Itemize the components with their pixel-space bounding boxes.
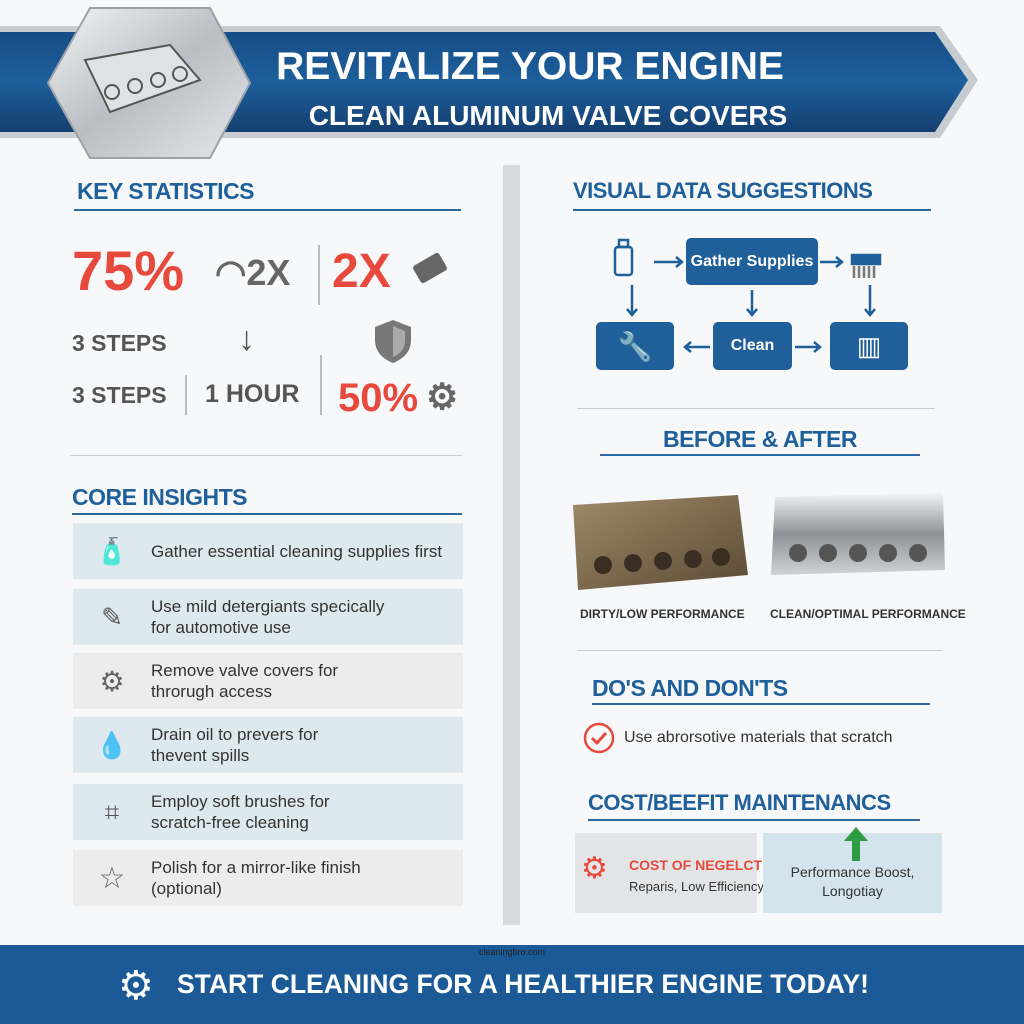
cost box (575, 833, 757, 913)
panel: core insights list: (optional) (151, 879, 222, 898)
panel: key statistics: ◠2X (215, 252, 290, 293)
heading: key statistics: KEY STATISTICS (77, 178, 254, 204)
cost box: COST OF NEGELCT (629, 857, 762, 873)
heading: do's and don'ts: DO'S AND DON'TS (592, 675, 788, 701)
panel: core insights list: Use mild detergiants specically (151, 597, 384, 616)
panel: key statistics: 75% (72, 239, 184, 302)
panel: core insights list: Polish for a mirror-like finish (151, 858, 361, 877)
panel: key statistics: 3 STEPS (72, 382, 167, 408)
panel: key statistics: 50% (338, 376, 418, 420)
panel: core insights list: ⌗ (105, 796, 119, 826)
panel: core insights list: throrugh access (151, 682, 272, 701)
benefit box: Longotiay (822, 883, 883, 899)
heading: visual data: VISUAL DATA SUGGESTIONS (573, 178, 872, 203)
flowchart: 🔧 (618, 330, 652, 362)
heading: core insights: CORE INSIGHTS (72, 484, 247, 510)
footer: START CLEANING FOR A HEALTHIER ENGINE TODAY! (177, 969, 869, 999)
panel: core insights list: scratch-free cleaning (151, 813, 309, 832)
footer (0, 945, 1024, 1024)
panel: core insights list: ⚙ (99, 666, 125, 696)
panel: core insights list: ✎ (101, 602, 123, 632)
heading: cost/benefit: COST/BEEFIT MAINTENANCS (588, 790, 891, 815)
flowchart: Clean (731, 337, 774, 354)
cost box: Reparis, Low Efficiency (629, 879, 764, 894)
benefit box (763, 833, 942, 913)
title: REVITALIZE YOUR ENGINE (276, 45, 784, 88)
panel: key statistics: ⚙ (426, 376, 458, 417)
panel: key statistics: ↓ (238, 320, 255, 358)
panel: core insights list (73, 523, 463, 906)
green arrow (844, 827, 868, 861)
panel: key statistics: 1 HOUR (205, 380, 299, 408)
heading: before & after: BEFORE & AFTER (663, 426, 857, 452)
footer: ⚙ (118, 964, 154, 1008)
panel: core insights list: 🧴 (96, 536, 128, 566)
footer: cleaningbro.com (479, 947, 545, 957)
caption: dirty: DIRTY/LOW PERFORMANCE (580, 607, 745, 621)
panel: core insights list: Gather essential cleaning supplies first (151, 542, 442, 560)
panel: key statistics (72, 239, 458, 420)
do item: Use abrorsotive materials that scratch (624, 729, 893, 746)
panel: core insights list: Drain oil to prevers for (151, 725, 318, 744)
flowchart (596, 238, 908, 370)
do item (584, 722, 893, 754)
panel: key statistics: 2X (332, 245, 391, 298)
divider bar (503, 165, 520, 925)
before/after images (573, 494, 945, 590)
panel: core insights list: ☆ (99, 862, 125, 894)
panel: core insights list: Remove valve covers for (151, 661, 338, 680)
benefit box: Performance Boost, (791, 864, 914, 880)
panel: core insights list: Employ soft brushes for (151, 792, 330, 811)
panel: key statistics: 3 STEPS (72, 330, 167, 356)
title (276, 45, 787, 131)
cost box: ⚙ (581, 852, 608, 885)
title: CLEAN ALUMINUM VALVE COVERS (309, 100, 787, 131)
panel: core insights list: thevent spills (151, 746, 249, 765)
header banner (0, 7, 978, 159)
caption: clean: CLEAN/OPTIMAL PERFORMANCE (770, 607, 966, 621)
panel: core insights list: for automotive use (151, 618, 291, 637)
panel: core insights list: 💧 (96, 730, 128, 760)
flowchart: Gather Supplies (691, 252, 813, 270)
flowchart: ▥ (857, 330, 881, 360)
